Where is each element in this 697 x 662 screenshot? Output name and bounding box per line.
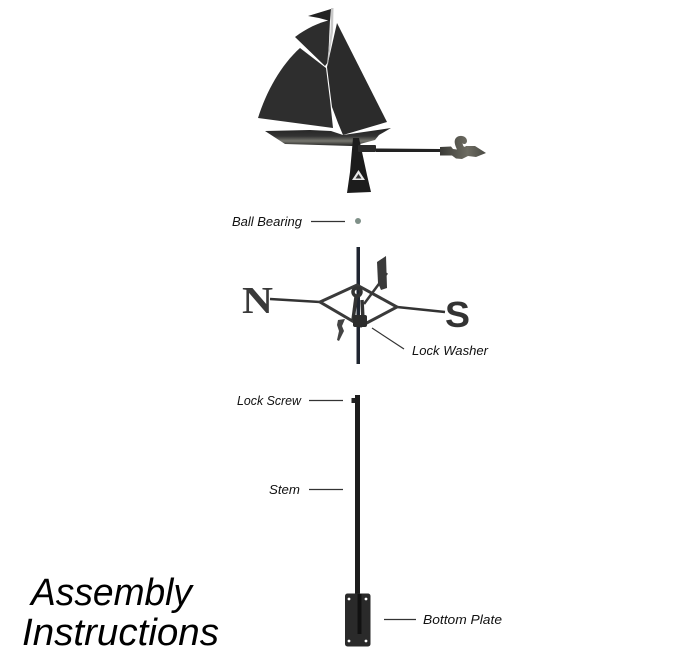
center mechanism <box>353 288 363 320</box>
label: Lock Washer <box>372 328 489 358</box>
spindle rod <box>356 247 360 364</box>
icon: sailboat weathervane ornament <box>258 8 486 193</box>
pennant flag <box>308 9 331 21</box>
label: Bottom Plate <box>384 612 502 627</box>
label: Ball Bearing: Ball Bearing <box>232 214 303 229</box>
title: Instructions <box>22 612 219 654</box>
label: Bottom Plate: Bottom Plate <box>423 612 502 627</box>
small sail detail <box>377 256 387 290</box>
mast <box>327 8 334 64</box>
main sail <box>258 48 333 128</box>
pedestal base <box>347 138 371 193</box>
fleur-de-lis tail <box>440 136 486 159</box>
label: Lock Screw: Lock Screw <box>237 393 303 408</box>
label: Stem <box>269 482 343 497</box>
icon: ball bearing <box>355 218 361 224</box>
bottom plate <box>345 594 370 646</box>
north arm <box>270 299 320 302</box>
letter N: N <box>242 280 273 322</box>
top sail <box>295 20 330 66</box>
label: Stem: Stem <box>269 482 300 497</box>
diamond frame <box>320 285 397 326</box>
stem <box>355 395 360 620</box>
lock screw nub <box>352 398 355 403</box>
letter S: S <box>445 294 470 335</box>
label: Lock Washer: Lock Washer <box>412 343 489 358</box>
icon: directional arms assembly <box>242 247 470 364</box>
jib sail <box>327 23 387 135</box>
icon: stem and bottom plate <box>345 395 370 646</box>
triangle badge <box>352 170 365 180</box>
scroll detail <box>337 319 345 341</box>
south arm <box>397 307 445 312</box>
label: Lock Screw <box>237 393 343 408</box>
title: Assembly <box>29 572 194 614</box>
hull <box>265 128 391 146</box>
title <box>22 572 219 654</box>
label: Ball Bearing <box>232 214 345 229</box>
tail arm <box>358 145 376 152</box>
